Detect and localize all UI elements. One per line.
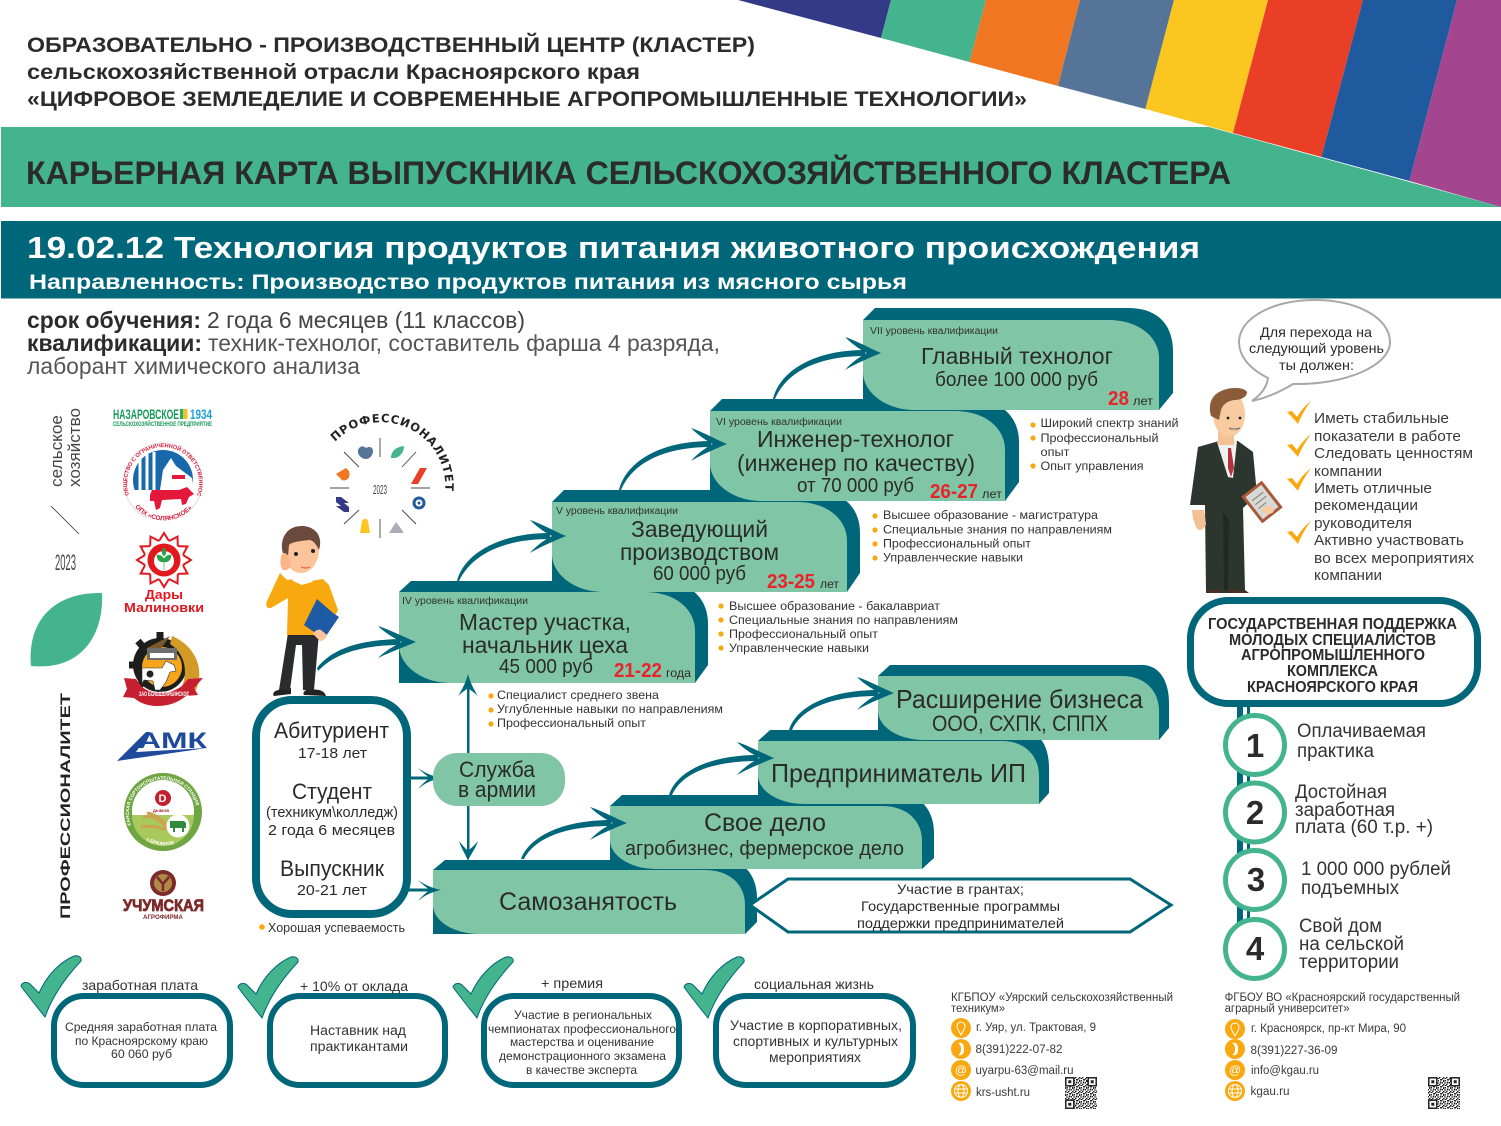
step: Предприниматель ИП: Предприниматель ИП <box>771 758 1026 788</box>
skills: level VII requirements: Широкий спектр знаний <box>1040 418 1178 430</box>
support item 2: плата (60 т.р. +) <box>1295 817 1433 838</box>
skills: level VII requirements <box>1030 418 1178 473</box>
step: Инженер-технолог <box>710 399 1019 503</box>
arrow: to business expansion <box>789 677 894 730</box>
contacts: technical college: 8(391)222-07-82 <box>976 1044 1062 1056</box>
logo: Учумская: АГРОФИРМА <box>143 915 184 921</box>
skills: level VI requirements: Специальные знания по направлениям <box>883 524 1112 536</box>
step: Заведующий производством: Заведующий <box>631 516 768 542</box>
step: Инженер-технолог: от 70 000 руб <box>797 475 914 497</box>
logo: Дары Малиновки: Дары <box>145 587 183 602</box>
checklist: requirements: показатели в работе <box>1314 428 1461 445</box>
study info: лаборант химического анализа <box>27 353 360 379</box>
callout: grants: Участие в грантах; <box>897 881 1024 897</box>
arrow: to level VI <box>619 428 727 490</box>
bottom card: salary: 60 060 руб <box>111 1047 172 1061</box>
logo: сортоиспытательная станция: с.БРАЖНОЕ <box>146 838 174 846</box>
support item 4: 4 <box>1246 930 1265 967</box>
step: Расширение бизнеса <box>878 665 1169 740</box>
step: Главный технолог: более 100 000 руб <box>935 369 1098 391</box>
contacts: agrarian university <box>1225 992 1460 1101</box>
skills: level V requirements <box>718 601 958 655</box>
cluster heading <box>27 33 1027 111</box>
step: Свое дело: Свое дело <box>704 809 826 837</box>
skills: level V requirements: Профессиональный опыт <box>729 629 879 641</box>
step: Заведующий производством: 60 000 руб <box>653 563 746 585</box>
logo: Дары Малиновки <box>124 533 204 615</box>
skills: level VII requirements: опыт <box>1040 447 1070 459</box>
logo: Назаровское <box>113 406 212 428</box>
left vertical branding: 2023 <box>55 550 76 575</box>
contacts: technical college: техникум» <box>951 1003 1005 1015</box>
contacts: technical college: г. Уяр, ул. Трактовая, 9 <box>976 1022 1096 1034</box>
step: Главный технолог: 28 <box>1108 388 1129 410</box>
title band: КАРЬЕРНАЯ КАРТА ВЫПУСКНИКА СЕЛЬСКОХОЗЯЙСТВЕННОГО КЛАСТЕРА <box>26 155 1231 191</box>
checklist: requirements: во всех мероприятиях <box>1314 550 1475 567</box>
step: Мастер участка: года <box>666 666 691 680</box>
logo: Дары Малиновки: Малиновки <box>124 600 204 615</box>
step: Мастер участка <box>399 581 708 683</box>
arrow: box to army <box>409 768 441 789</box>
panel: student path box <box>256 700 407 914</box>
panel: state support: КРАСНОЯРСКОГО КРАЯ <box>1247 679 1418 696</box>
contacts: technical college: КГБПОУ «Уярский сельскохозяйственный <box>951 992 1173 1004</box>
step: Расширение бизнеса: ООО, СХПК, СППХ <box>932 711 1108 736</box>
bottom card: social life: мероприятиях <box>769 1049 861 1065</box>
arrow: student to level IV <box>317 626 416 671</box>
checklist: requirements: Иметь отличные <box>1314 480 1432 497</box>
support item 2: 2 <box>1246 794 1264 831</box>
contacts: technical college: uyarpu-63@mail.ru <box>976 1065 1074 1077</box>
study info: квалификации: <box>27 330 202 356</box>
skills: level VI requirements: Высшее образование - магистратура <box>883 510 1099 522</box>
contacts: agrarian university: kgau.ru <box>1250 1086 1290 1098</box>
logo: сортоиспытательная станция: ДЫМОВ <box>153 808 169 813</box>
cluster heading: сельскохозяйственной отрасли Красноярского края <box>27 61 640 84</box>
support item 2: заработная <box>1295 800 1395 821</box>
Профессионалитет emblem: 2023 <box>373 482 387 497</box>
bottom card: salary: заработная плата <box>82 977 198 993</box>
bottom card: social life <box>684 957 913 1085</box>
skills: level IV requirements: Специалист среднего звена <box>497 690 660 702</box>
logo: ЗАО с коровой: ЗАО БОЛЬШЕИРБИНСКОЕ <box>139 692 189 698</box>
checklist: requirements: Активно участвовать <box>1314 532 1464 549</box>
panel: student path box: (техникум\колледж) <box>266 804 398 821</box>
logo: АМК: АМК <box>138 728 208 753</box>
step: Свое дело <box>610 795 934 869</box>
skills: level VII requirements: Опыт управления <box>1040 461 1144 473</box>
step: Расширение бизнеса: Расширение бизнеса <box>896 684 1144 714</box>
bottom card: mentor: практикантами <box>310 1039 408 1054</box>
step: Самозанятость: Самозанятость <box>499 888 677 916</box>
step: Главный технолог: VII уровень квалификации <box>870 325 998 337</box>
left vertical branding: хозяйство <box>66 408 84 487</box>
checklist: requirements <box>1287 401 1475 584</box>
step: Инженер-технолог: 26-27 <box>930 481 978 503</box>
panel: student path box: Выпускник <box>280 856 384 881</box>
step: Предприниматель ИП <box>758 730 1049 804</box>
cluster heading: ОБРАЗОВАТЕЛЬНО - ПРОИЗВОДСТВЕННЫЙ ЦЕНТР (КЛАСТЕР) <box>27 33 755 57</box>
panel: state support: АГРОПРОМЫШЛЕННОГО <box>1241 647 1425 664</box>
step: Заведующий производством: V уровень квалификации <box>556 505 678 517</box>
bottom card: mentor: + 10% от оклада <box>300 978 408 994</box>
title band <box>1 127 1501 207</box>
skills: level V requirements: Специальные знания по направлениям <box>729 615 958 627</box>
contacts: agrarian university: ФГБОУ ВО «Красноярский государственный <box>1225 992 1460 1004</box>
checklist: requirements: Следовать ценностям <box>1314 445 1473 462</box>
support item 2 <box>1226 782 1433 842</box>
support item 3: подъемных <box>1301 878 1399 899</box>
bottom card: salary: Средняя заработная плата <box>65 1020 217 1034</box>
logo: Учумская: УЧУМСКАЯ <box>123 896 204 915</box>
study info: техник-технолог, составитель фарша 4 разряда, <box>208 330 720 356</box>
support item 1: 1 <box>1246 727 1264 764</box>
support item 1: Оплачиваемая <box>1297 721 1426 742</box>
specialty band: 19.02.12 Технология продуктов питания животного происхождения <box>27 230 1200 265</box>
logo: сортоиспытательная станция <box>124 773 202 851</box>
skills: level VI requirements: Профессиональный опыт <box>883 538 1032 550</box>
left vertical branding <box>31 408 102 919</box>
study info: 2 года 6 месяцев (11 классов) <box>207 307 525 333</box>
step: Мастер участка: Мастер участка, <box>459 609 631 635</box>
speech bubble <box>1239 300 1390 401</box>
step: Заведующий производством <box>552 490 860 593</box>
logo: Назаровское: НАЗАРОВСКОЕ <box>113 406 179 422</box>
skills: level VII requirements: Профессиональный <box>1040 433 1158 445</box>
support item 1 <box>1226 716 1426 774</box>
box: military service: Служба <box>459 757 536 782</box>
specialty band <box>1 221 1501 298</box>
bottom card: social life: социальная жизнь <box>754 976 874 992</box>
callout: grants <box>750 879 1171 932</box>
bottom card: mentor <box>238 957 445 1085</box>
bottom card: championships: Участие в региональных <box>514 1008 652 1022</box>
skills: level IV requirements: Профессиональный опыт <box>497 718 647 730</box>
step: Заведующий производством: производством <box>620 539 779 565</box>
header stripes <box>738 0 1501 207</box>
step: Инженер-технолог: лет <box>982 487 1003 501</box>
checklist: requirements: Иметь стабильные <box>1314 410 1449 427</box>
panel: state support: МОЛОДЫХ СПЕЦИАЛИСТОВ <box>1229 632 1436 649</box>
panel: student path box: 17-18 лет <box>298 745 367 762</box>
bottom card: championships: мастерства и оценивание <box>510 1035 654 1049</box>
logo: ОПХ Солянское <box>123 442 203 520</box>
support item 4: территории <box>1299 952 1399 973</box>
bottom card: championships <box>453 957 679 1085</box>
left vertical branding: сельское <box>48 415 66 487</box>
study info: срок обучения: <box>27 307 201 333</box>
logo: АМК <box>117 728 208 761</box>
arrow: army up to level IV <box>458 674 478 754</box>
logo: ЗАО с коровой <box>123 632 203 706</box>
panel: student path box: Студент <box>292 779 372 804</box>
contacts: agrarian university: 8(391)227-36-09 <box>1250 1045 1338 1057</box>
arrow: box to self-employment <box>407 880 441 901</box>
study info <box>27 307 720 379</box>
step: Самозанятость <box>433 860 757 934</box>
speech bubble: ты должен: <box>1279 357 1354 373</box>
contacts: technical college: @ <box>955 1063 967 1077</box>
logo: Учумская <box>123 870 204 921</box>
panel: state support <box>1190 600 1478 704</box>
bottom card: social life: Участие в корпоративных, <box>730 1017 902 1033</box>
checklist: requirements: руководителя <box>1314 515 1412 532</box>
skills: level IV requirements <box>488 690 723 730</box>
step: Инженер-технолог: VI уровень квалификации <box>716 416 842 428</box>
support item 4 <box>1226 916 1404 978</box>
left vertical branding: ПРОФЕССИОНАЛИТЕТ <box>57 692 73 919</box>
skills: level VI requirements <box>872 510 1112 564</box>
step: Мастер участка: IV уровень квалификации <box>402 595 528 607</box>
bottom card: salary <box>21 956 230 1085</box>
step: Свое дело: агробизнес, фермерское дело <box>625 838 904 860</box>
arrow: to sole proprietor <box>669 742 774 795</box>
checklist: requirements: компании <box>1314 567 1382 584</box>
panel: student path box: Абитуриент <box>274 718 389 743</box>
support item 1: практика <box>1297 741 1374 762</box>
QR code: agrarian university <box>1428 1077 1460 1109</box>
panel: state support: КОМПЛЕКСА <box>1287 663 1378 680</box>
contacts: agrarian university: г. Красноярск, пр-кт Мира, 90 <box>1251 1023 1406 1035</box>
support list connector <box>1237 700 1250 940</box>
contacts: technical college: krs-usht.ru <box>976 1087 1030 1099</box>
callout: grants: поддержки предпринимателей <box>857 915 1064 931</box>
step: Главный технолог <box>863 308 1173 410</box>
skills: level IV requirements: Углубленные навыки по направлениям <box>497 704 723 716</box>
bottom card: championships: + премия <box>541 975 603 991</box>
logo: Назаровское: СЕЛЬСКОХОЗЯЙСТВЕННОЕ ПРЕДПРИЯТИЕ <box>113 420 212 428</box>
bottom card: championships: чемпионатах профессионального <box>488 1022 676 1036</box>
arrow: to level VII <box>773 337 881 399</box>
businessman figure <box>1190 388 1283 593</box>
panel: student path box: 20-21 лет <box>297 882 367 899</box>
step: Заведующий производством: лет <box>820 577 840 591</box>
contacts: technical college <box>951 992 1173 1101</box>
bottom card: salary: по Красноярскому краю <box>75 1034 208 1048</box>
bottom card: championships: демонстрационного экзамена <box>499 1049 666 1063</box>
contacts: agrarian university: аграрный университет» <box>1225 1003 1350 1015</box>
box: military service <box>433 753 565 806</box>
support item 3 <box>1226 850 1451 910</box>
contacts: agrarian university: info@kgau.ru <box>1251 1065 1319 1077</box>
specialty band: Направленность: Производство продуктов питания из мясного сырья <box>29 270 907 294</box>
logo: ОПХ Солянское: ОБЩЕСТВО С ОГРАНИЧЕННОЙ ОТВЕТСТВЕННОСТЬЮ <box>123 443 203 496</box>
speech bubble: следующий уровень <box>1249 340 1384 356</box>
step: Инженер-технолог: (инженер по качеству) <box>737 450 975 476</box>
skills: level VI requirements: Управленческие навыки <box>883 552 1023 564</box>
arrow: to own business <box>521 807 627 859</box>
step: Мастер участка: начальник цеха <box>462 632 628 658</box>
logo: ОПХ Солянское: ОПХ «СОЛЯНСКОЕ» <box>136 504 192 520</box>
arrow: army down to self-employment <box>459 806 478 861</box>
panel: student path box: 2 года 6 месяцев <box>268 822 395 839</box>
student figure <box>266 526 339 696</box>
bottom card: championships: в качестве эксперта <box>526 1063 637 1077</box>
checklist: requirements: компании <box>1314 463 1382 480</box>
skills: level V requirements: Управленческие навыки <box>729 643 869 655</box>
box: military service: в армии <box>458 777 536 802</box>
support item 3: 3 <box>1247 861 1265 898</box>
cluster heading: «ЦИФРОВОЕ ЗЕМЛЕДЕЛИЕ И СОВРЕМЕННЫЕ АГРОПРОМЫШЛЕННЫЕ ТЕХНОЛОГИИ» <box>27 88 1027 111</box>
checklist: requirements: рекомендации <box>1314 497 1418 514</box>
Профессионалитет emblem <box>330 414 454 538</box>
support item 2: Достойная <box>1295 782 1387 803</box>
logo: сортоиспытательная станция: D <box>158 793 166 805</box>
bottom card: social life: спортивных и культурных <box>733 1033 898 1049</box>
step: Главный технолог: лет <box>1133 394 1154 408</box>
step: Главный технолог: Главный технолог <box>921 343 1113 369</box>
step: Заведующий производством: 23-25 <box>767 571 815 593</box>
logo: сортоиспытательная станция: КАНСКАЯ СОРТОИСПЫТАТЕЛЬНАЯ СТАНЦИЯ <box>126 776 200 826</box>
callout: grants: Государственные программы <box>861 898 1060 914</box>
step: Мастер участка: 45 000 руб <box>499 656 593 678</box>
logo: Назаровское: 1934 <box>190 406 212 422</box>
step: Инженер-технолог: Инженер-технолог <box>757 426 954 452</box>
QR code: technical college <box>1065 1077 1097 1109</box>
arrow: to level V <box>457 520 566 581</box>
note: good grades: Хорошая успеваемость <box>268 921 405 935</box>
panel: state support: ГОСУДАРСТВЕННАЯ ПОДДЕРЖКА <box>1208 616 1457 633</box>
support item 4: Свой дом <box>1299 916 1382 937</box>
bottom card: mentor: Наставник над <box>310 1023 406 1038</box>
speech bubble: Для перехода на <box>1260 324 1372 340</box>
support item 4: на сельской <box>1299 934 1404 955</box>
contacts: agrarian university: @ <box>1229 1063 1241 1077</box>
Профессионалитет emblem: ПРОФЕССИОНАЛИТЕТ <box>330 414 454 491</box>
skills: level V requirements: Высшее образование - бакалавриат <box>729 601 941 613</box>
support item 3: 1 000 000 рублей <box>1301 859 1451 880</box>
step: Мастер участка: 21-22 <box>614 660 662 682</box>
